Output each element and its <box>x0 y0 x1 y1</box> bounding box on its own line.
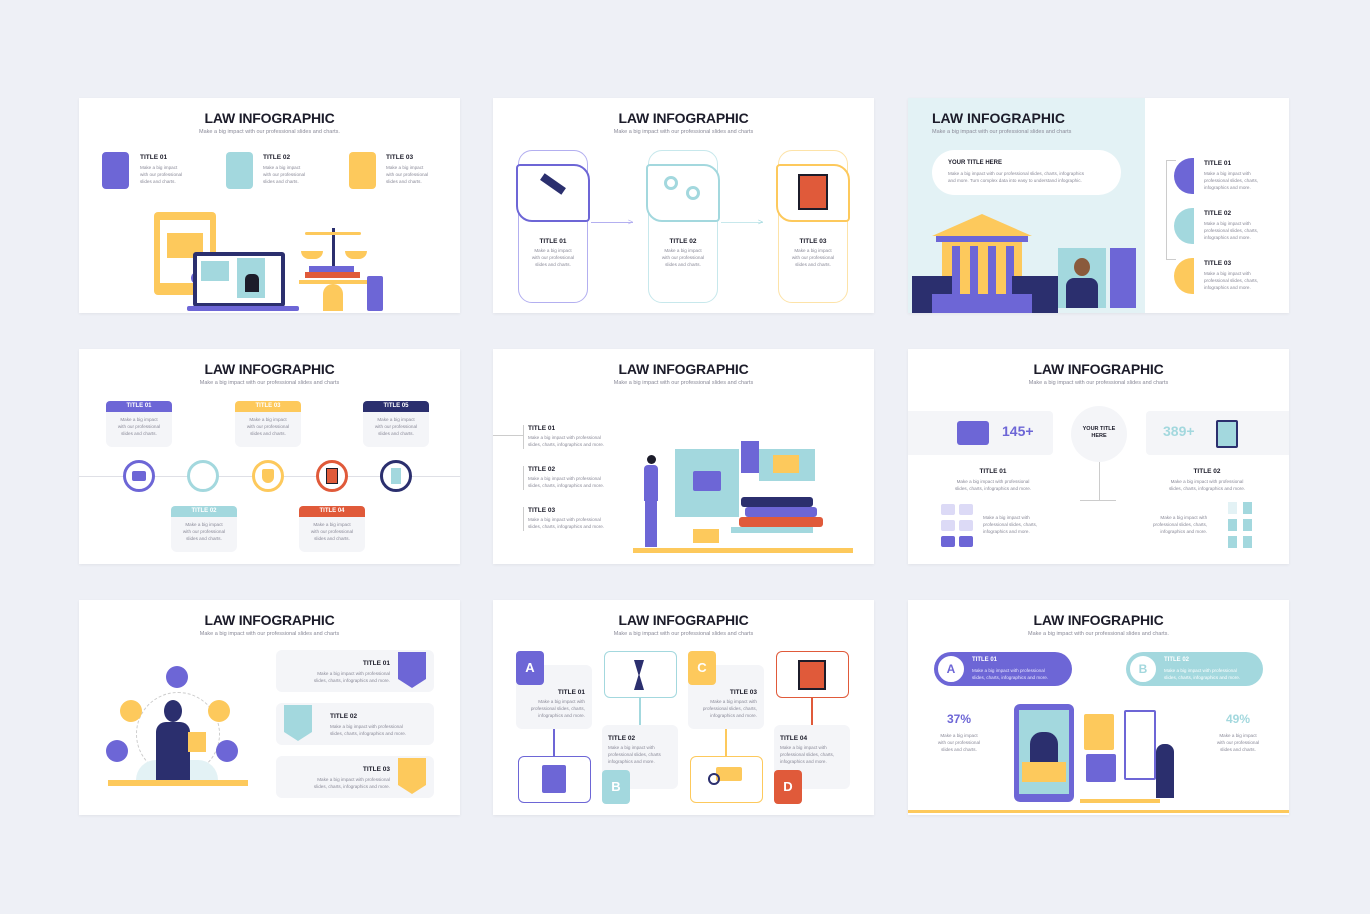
item 1: infographics and more. <box>1204 185 1251 190</box>
item 2: infographics and more. <box>1204 235 1251 240</box>
card 1: gavel: TITLE 01 <box>539 238 567 245</box>
pill A: A <box>947 662 955 676</box>
box title 02: with our professional <box>183 529 225 534</box>
stat 49%: slides and charts. <box>1220 747 1256 752</box>
slide 1 <box>79 98 460 313</box>
list item 1 <box>493 425 604 449</box>
step C: TITLE 03 <box>730 689 757 696</box>
item 3: Make a big impact with <box>1204 271 1251 276</box>
text: title 02: TITLE 02 <box>263 154 290 161</box>
item 2: slides, charts, infographics and more. <box>330 731 406 736</box>
pill B <box>1126 652 1263 686</box>
circle: your title here <box>1071 406 1127 462</box>
text title 02: TITLE 02 <box>1193 468 1221 475</box>
stat 37%: with our professional <box>938 740 980 745</box>
list item 2: slides, charts, infographics and more. <box>528 483 604 488</box>
step D: Make a big impact with <box>780 745 827 750</box>
box title 04 <box>299 506 365 552</box>
circle: your title here: YOUR TITLE <box>1083 426 1115 432</box>
step A: TITLE 01 <box>558 689 585 696</box>
text title 02 <box>1169 468 1245 491</box>
stat 37% <box>938 712 980 752</box>
item 2 <box>1174 208 1258 244</box>
illustration: gavel panel <box>1110 248 1136 308</box>
card 1: gavel: Make a big impact <box>534 248 572 253</box>
item 1: slides, charts, infographics and more. <box>314 678 390 683</box>
slide 8 <box>493 600 874 815</box>
box title 02: slides and charts. <box>186 536 222 541</box>
callout pill: and more. Turn complex data into easy to understand infographic. <box>948 178 1082 183</box>
text: title 01 <box>140 154 182 184</box>
step D: TITLE 04 <box>780 735 807 742</box>
item 3: professional slides, charts, <box>1204 278 1258 283</box>
item 2: Make a big impact with professional <box>330 724 403 729</box>
illustration: courthouse <box>912 214 1058 313</box>
box title 01: with our professional <box>118 424 160 429</box>
box title 01: Make a big impact <box>120 417 158 422</box>
stat 37%: 37% <box>947 712 971 726</box>
title: LAW INFOGRAPHIC <box>932 110 1065 126</box>
box title 03: slides and charts. <box>250 431 286 436</box>
box title 01 <box>106 401 172 447</box>
item 3 <box>276 756 434 798</box>
item 3: Make a big impact with professional <box>317 777 390 782</box>
item 1 <box>276 650 434 692</box>
item 3 <box>1174 258 1258 294</box>
step D: infographics and more. <box>780 759 827 764</box>
title: LAW INFOGRAPHIC <box>1034 361 1164 377</box>
stat 49%: with our professional <box>1217 740 1259 745</box>
text title 02: slides, charts, infographics and more. <box>1169 486 1245 491</box>
text block left: professional slides, charts, <box>983 522 1037 527</box>
text block right: Make a big impact with <box>1160 515 1207 520</box>
item 2: TITLE 02 <box>330 713 357 720</box>
text block right: professional slides, charts, <box>1153 522 1207 527</box>
subtitle: Make a big impact with our professional slides and charts <box>1029 380 1168 386</box>
pill A: Make a big impact with professional <box>972 668 1045 673</box>
text block left <box>983 515 1037 534</box>
step B: infographics and more. <box>608 759 655 764</box>
icon grid briefcases <box>941 504 973 547</box>
box title 05: Make a big impact <box>377 417 415 422</box>
item 2: professional slides, charts, <box>1204 228 1258 233</box>
text block right: infographics and more. <box>1160 529 1207 534</box>
card 2: handcuffs: with our professional <box>662 255 704 260</box>
illustration: laptop <box>187 252 299 311</box>
text: title 01: Make a big impact <box>140 165 177 170</box>
step B <box>602 651 678 804</box>
illustration: lawyer with icons <box>106 666 248 786</box>
arrow <box>591 222 633 236</box>
subtitle: Make a big impact with our professional slides and charts <box>200 631 339 637</box>
text title 01: TITLE 01 <box>979 468 1007 475</box>
slide 7 <box>79 600 460 815</box>
timeline line <box>79 476 460 477</box>
slide 2 <box>493 98 874 313</box>
box title 01: TITLE 01 <box>126 403 152 409</box>
item 1 <box>1174 158 1258 194</box>
stat box 145+ <box>908 411 1053 455</box>
text block right <box>1153 515 1207 534</box>
icon: signature <box>349 152 376 189</box>
list item 2: TITLE 02 <box>528 466 555 473</box>
step B: professional slides, charts <box>608 752 661 757</box>
callout pill: Make a big impact with our professional slides, charts, infographics <box>948 171 1084 176</box>
connector arrow <box>1080 462 1116 501</box>
title: LAW INFOGRAPHIC <box>204 110 334 126</box>
box title 05 <box>363 401 429 447</box>
step D: D <box>783 779 793 794</box>
illustration: judge portrait <box>1058 248 1106 308</box>
illustration: tablet document <box>154 212 216 295</box>
list item 2 <box>523 466 604 490</box>
illustration: phone and dashboards <box>1014 704 1174 803</box>
text: title 01: slides and charts. <box>140 179 176 184</box>
stat box 145+: 145+ <box>1002 423 1034 439</box>
item 1: Make a big impact with <box>1204 171 1251 176</box>
card 2: handcuffs: Make a big impact <box>664 248 702 253</box>
stat box 389+: 389+ <box>1163 423 1195 439</box>
pill B: Make a big impact with professional <box>1164 668 1237 673</box>
list item 1: slides, charts, infographics and more. <box>528 442 604 447</box>
step C: C <box>697 660 707 675</box>
item 3: slides, charts, infographics and more. <box>314 784 390 789</box>
card 2: handcuffs: TITLE 02 <box>669 238 697 245</box>
title: LAW INFOGRAPHIC <box>204 361 334 377</box>
list item 3: slides, charts, infographics and more. <box>528 524 604 529</box>
text block left: infographics and more. <box>983 529 1030 534</box>
connector line <box>1166 160 1176 260</box>
text title 01: slides, charts, infographics and more. <box>955 486 1031 491</box>
subtitle: Make a big impact with our professional slides and charts <box>614 129 753 135</box>
box title 01: slides and charts. <box>121 431 157 436</box>
step A: A <box>525 660 535 675</box>
card 3: prisoner: TITLE 03 <box>799 238 827 245</box>
title: LAW INFOGRAPHIC <box>1034 612 1164 628</box>
pill B: TITLE 02 <box>1164 657 1189 663</box>
subtitle: Make a big impact with our professional slides and charts <box>614 631 753 637</box>
step A: professional slides, charts, <box>531 706 585 711</box>
pill B: B <box>1139 662 1147 676</box>
icon: handshake <box>102 152 129 189</box>
step A: Make a big impact with <box>538 699 585 704</box>
box title 05: TITLE 05 <box>383 403 408 409</box>
text title 01 <box>955 468 1031 491</box>
step C: infographics and more. <box>710 713 757 718</box>
box title 02: Make a big impact <box>185 522 223 527</box>
title: LAW INFOGRAPHIC <box>618 361 748 377</box>
pill A: slides, charts, infographics and more. <box>972 675 1048 680</box>
card 3: prisoner: with our professional <box>792 255 834 260</box>
box title 03 <box>235 401 301 447</box>
stat 37%: slides and charts. <box>941 747 977 752</box>
box title 03: TITLE 03 <box>255 403 280 409</box>
item 3: infographics and more. <box>1204 285 1251 290</box>
arrow: > <box>628 217 633 227</box>
card 3: prisoner <box>776 150 850 303</box>
text: title 02: with our professional <box>263 172 305 177</box>
box title 03: Make a big impact <box>249 417 287 422</box>
card 3: prisoner: slides and charts. <box>795 262 831 267</box>
subtitle: Make a big impact with our professional slides and charts <box>200 380 339 386</box>
item 3: TITLE 03 <box>363 766 390 773</box>
box title 04: slides and charts. <box>314 536 350 541</box>
card 1: gavel <box>516 150 590 303</box>
list item 1: Make a big impact with professional <box>528 435 601 440</box>
title: LAW INFOGRAPHIC <box>618 612 748 628</box>
slide 3 <box>908 98 1289 313</box>
stat 49%: 49% <box>1226 712 1250 726</box>
text block left: Make a big impact with <box>983 515 1030 520</box>
list item 3 <box>523 507 604 531</box>
item 1: professional slides, charts, <box>1204 178 1258 183</box>
stat 49% <box>1216 712 1259 752</box>
slide 6 <box>908 349 1289 564</box>
box title 04: TITLE 04 <box>319 508 344 514</box>
item 2: Make a big impact with <box>1204 221 1251 226</box>
pill A <box>934 652 1072 686</box>
stat 49%: Make a big impact <box>1219 733 1257 738</box>
arrow: > <box>758 217 763 227</box>
step B: TITLE 02 <box>608 735 635 742</box>
text title 01: Make a big impact with professional <box>957 479 1029 484</box>
card 1: gavel: slides and charts. <box>535 262 571 267</box>
box title 04: Make a big impact <box>313 522 351 527</box>
box title 05: slides and charts. <box>378 431 414 436</box>
card 1: gavel: with our professional <box>532 255 574 260</box>
text: title 03: Make a big impact <box>386 165 423 170</box>
text: title 02: slides and charts. <box>263 179 299 184</box>
text: title 01: with our professional <box>140 172 182 177</box>
item 1: TITLE 01 <box>363 660 390 667</box>
icon circles <box>123 460 412 492</box>
list item 3: Make a big impact with professional <box>528 517 601 522</box>
title: LAW INFOGRAPHIC <box>618 110 748 126</box>
text: title 01: TITLE 01 <box>140 154 167 161</box>
subtitle: Make a big impact with our professional slides and charts <box>614 380 753 386</box>
subtitle: Make a big impact with our professional slides and charts <box>932 129 1071 135</box>
illustration: pen cup <box>367 276 383 311</box>
text: title 02 <box>263 154 305 184</box>
subtitle: Make a big impact with our professional slides and charts. <box>1028 631 1169 637</box>
text: title 03 <box>386 154 428 184</box>
icon: certificate <box>226 152 253 189</box>
item 2: TITLE 02 <box>1204 210 1231 217</box>
box title 03: with our professional <box>247 424 289 429</box>
stat box 389+ <box>1146 411 1289 455</box>
teal background panel <box>908 98 1145 313</box>
step A: infographics and more. <box>538 713 585 718</box>
text: title 03: slides and charts. <box>386 179 422 184</box>
step C: Make a big impact with <box>710 699 757 704</box>
pill A: TITLE 01 <box>972 657 997 663</box>
step C <box>688 651 764 803</box>
step B: B <box>611 779 621 794</box>
illustration: lawyer at desk <box>633 441 853 553</box>
item 1: Make a big impact with professional <box>317 671 390 676</box>
card 2: handcuffs <box>646 150 720 303</box>
item 3: TITLE 03 <box>1204 260 1231 267</box>
step B: Make a big impact with <box>608 745 655 750</box>
icon grid documents <box>1228 502 1252 548</box>
slide 4 <box>79 349 460 564</box>
step D <box>774 651 850 804</box>
text: title 02: Make a big impact <box>263 165 300 170</box>
arrow <box>721 222 763 236</box>
list item 2: Make a big impact with professional <box>528 476 601 481</box>
list item 1: TITLE 01 <box>528 425 555 432</box>
card 3: prisoner: Make a big impact <box>794 248 832 253</box>
circle: your title here: HERE <box>1091 433 1107 439</box>
slide 5 <box>493 349 874 564</box>
subtitle: Make a big impact with our professional slides and charts. <box>199 129 340 135</box>
illustration: scales of justice <box>299 228 367 311</box>
text title 02: Make a big impact with professional <box>1171 479 1243 484</box>
box title 02: TITLE 02 <box>191 508 216 514</box>
stat 37%: Make a big impact <box>940 733 978 738</box>
baseline <box>908 810 1289 813</box>
step C: professional slides, charts, <box>703 706 757 711</box>
step A <box>516 651 592 803</box>
text: title 03: TITLE 03 <box>386 154 413 161</box>
card 2: handcuffs: slides and charts. <box>665 262 701 267</box>
step D: professional slides, charts, <box>780 752 834 757</box>
list item 3: TITLE 03 <box>528 507 555 514</box>
box title 05: with our professional <box>375 424 417 429</box>
box title 02 <box>171 506 237 552</box>
text: title 03: with our professional <box>386 172 428 177</box>
callout pill: YOUR TITLE HERE <box>948 160 1002 166</box>
callout pill <box>932 150 1121 195</box>
box title 04: with our professional <box>311 529 353 534</box>
pill B: slides, charts, infographics and more. <box>1164 675 1240 680</box>
item 2 <box>276 703 434 745</box>
item 1: TITLE 01 <box>1204 160 1231 167</box>
slide 9 <box>908 600 1289 815</box>
title: LAW INFOGRAPHIC <box>204 612 334 628</box>
